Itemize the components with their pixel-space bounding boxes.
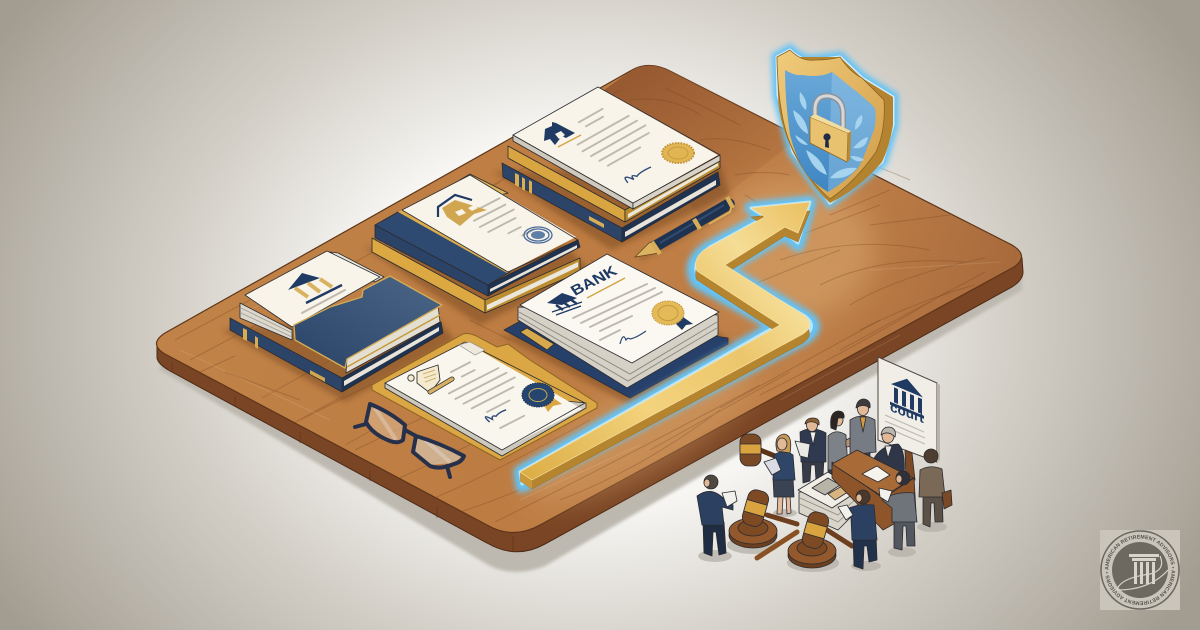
icon: bank temple (288, 273, 342, 303)
court sign (878, 357, 940, 462)
gold tab (460, 174, 508, 198)
judge's desk (832, 450, 916, 530)
person: brown suit man (919, 449, 952, 527)
seal (652, 301, 693, 330)
document (513, 87, 718, 203)
navy folder flap (294, 276, 442, 368)
folded corner (459, 342, 485, 355)
navy book (502, 163, 622, 242)
floor shadows (698, 509, 947, 572)
shield side (777, 57, 893, 203)
table top surface (156, 65, 1022, 533)
table edge (157, 258, 1023, 552)
shield face (777, 50, 884, 199)
person: grey suit man (850, 399, 876, 460)
certificate (520, 254, 719, 363)
person: woman in navy (764, 434, 795, 514)
pen on floor (757, 532, 797, 558)
signature (483, 408, 510, 422)
logo: American Retirement Advisors (1100, 530, 1180, 610)
person: navy suit man (838, 490, 877, 569)
signature (622, 165, 653, 183)
seal (662, 143, 694, 163)
courtroom scene (697, 357, 952, 572)
navy folder flap sides (346, 305, 440, 373)
gold clip (520, 328, 554, 350)
gold book (508, 146, 625, 222)
document (402, 175, 576, 272)
leaves (793, 92, 868, 178)
document (245, 251, 380, 327)
stack: bank certificate on navy folder (500, 254, 735, 405)
navy cover sides (375, 225, 488, 296)
wood grain (175, 88, 1000, 522)
navy cover (375, 212, 510, 285)
person: grey jacket man (879, 471, 917, 550)
padlock (810, 96, 851, 162)
pages (240, 303, 292, 340)
shield blue field (785, 70, 876, 192)
bank heading: BANK (568, 263, 621, 299)
stack: bank document with navy folder (222, 251, 455, 402)
navy folder (504, 310, 728, 398)
arrow top (520, 202, 810, 480)
highlight near arrow (705, 180, 875, 320)
pages (385, 383, 586, 456)
arrow side (520, 211, 810, 489)
gavel: left (729, 488, 797, 548)
person: man with document (795, 418, 826, 483)
paper pile (798, 472, 858, 530)
icon: fountain pen (635, 197, 735, 258)
gold folder (372, 334, 597, 460)
icon: house (544, 122, 581, 147)
protective shield with padlock (777, 50, 893, 203)
signature (620, 331, 646, 344)
person: man reading, left (697, 475, 737, 556)
page stack (518, 307, 718, 388)
seal (522, 383, 562, 412)
icon: bank (547, 293, 582, 315)
stack: house deed on gold and navy books (494, 87, 730, 250)
icon: house (438, 195, 487, 226)
court label: court (890, 398, 924, 426)
golden arrow path (520, 202, 814, 489)
icon: court temple (890, 372, 924, 419)
person: judge (872, 427, 904, 478)
judge's chair (905, 450, 915, 482)
icon: glasses (355, 404, 464, 477)
table shadow (160, 270, 1022, 572)
arrow glow (520, 202, 814, 486)
wooden table (156, 65, 1023, 552)
stack: house deed in navy folder on gold book (365, 174, 590, 325)
gavel: upper (740, 434, 775, 466)
back page (330, 252, 384, 282)
logo ring text: AMERICAN RETIREMENT ADVISORS • AMERICAN RETIREMENT ADVISORS • (1104, 534, 1176, 606)
seal (524, 227, 552, 243)
icon: scroll (408, 365, 452, 393)
gavel: front (788, 510, 852, 568)
gold book (372, 238, 485, 313)
person: woman with dark hair (828, 411, 858, 490)
stack: will on gold folder (372, 334, 597, 460)
navy book (230, 318, 342, 392)
pages (513, 135, 633, 209)
shield glow (777, 50, 893, 202)
logo column (1129, 554, 1159, 584)
document (385, 342, 582, 450)
